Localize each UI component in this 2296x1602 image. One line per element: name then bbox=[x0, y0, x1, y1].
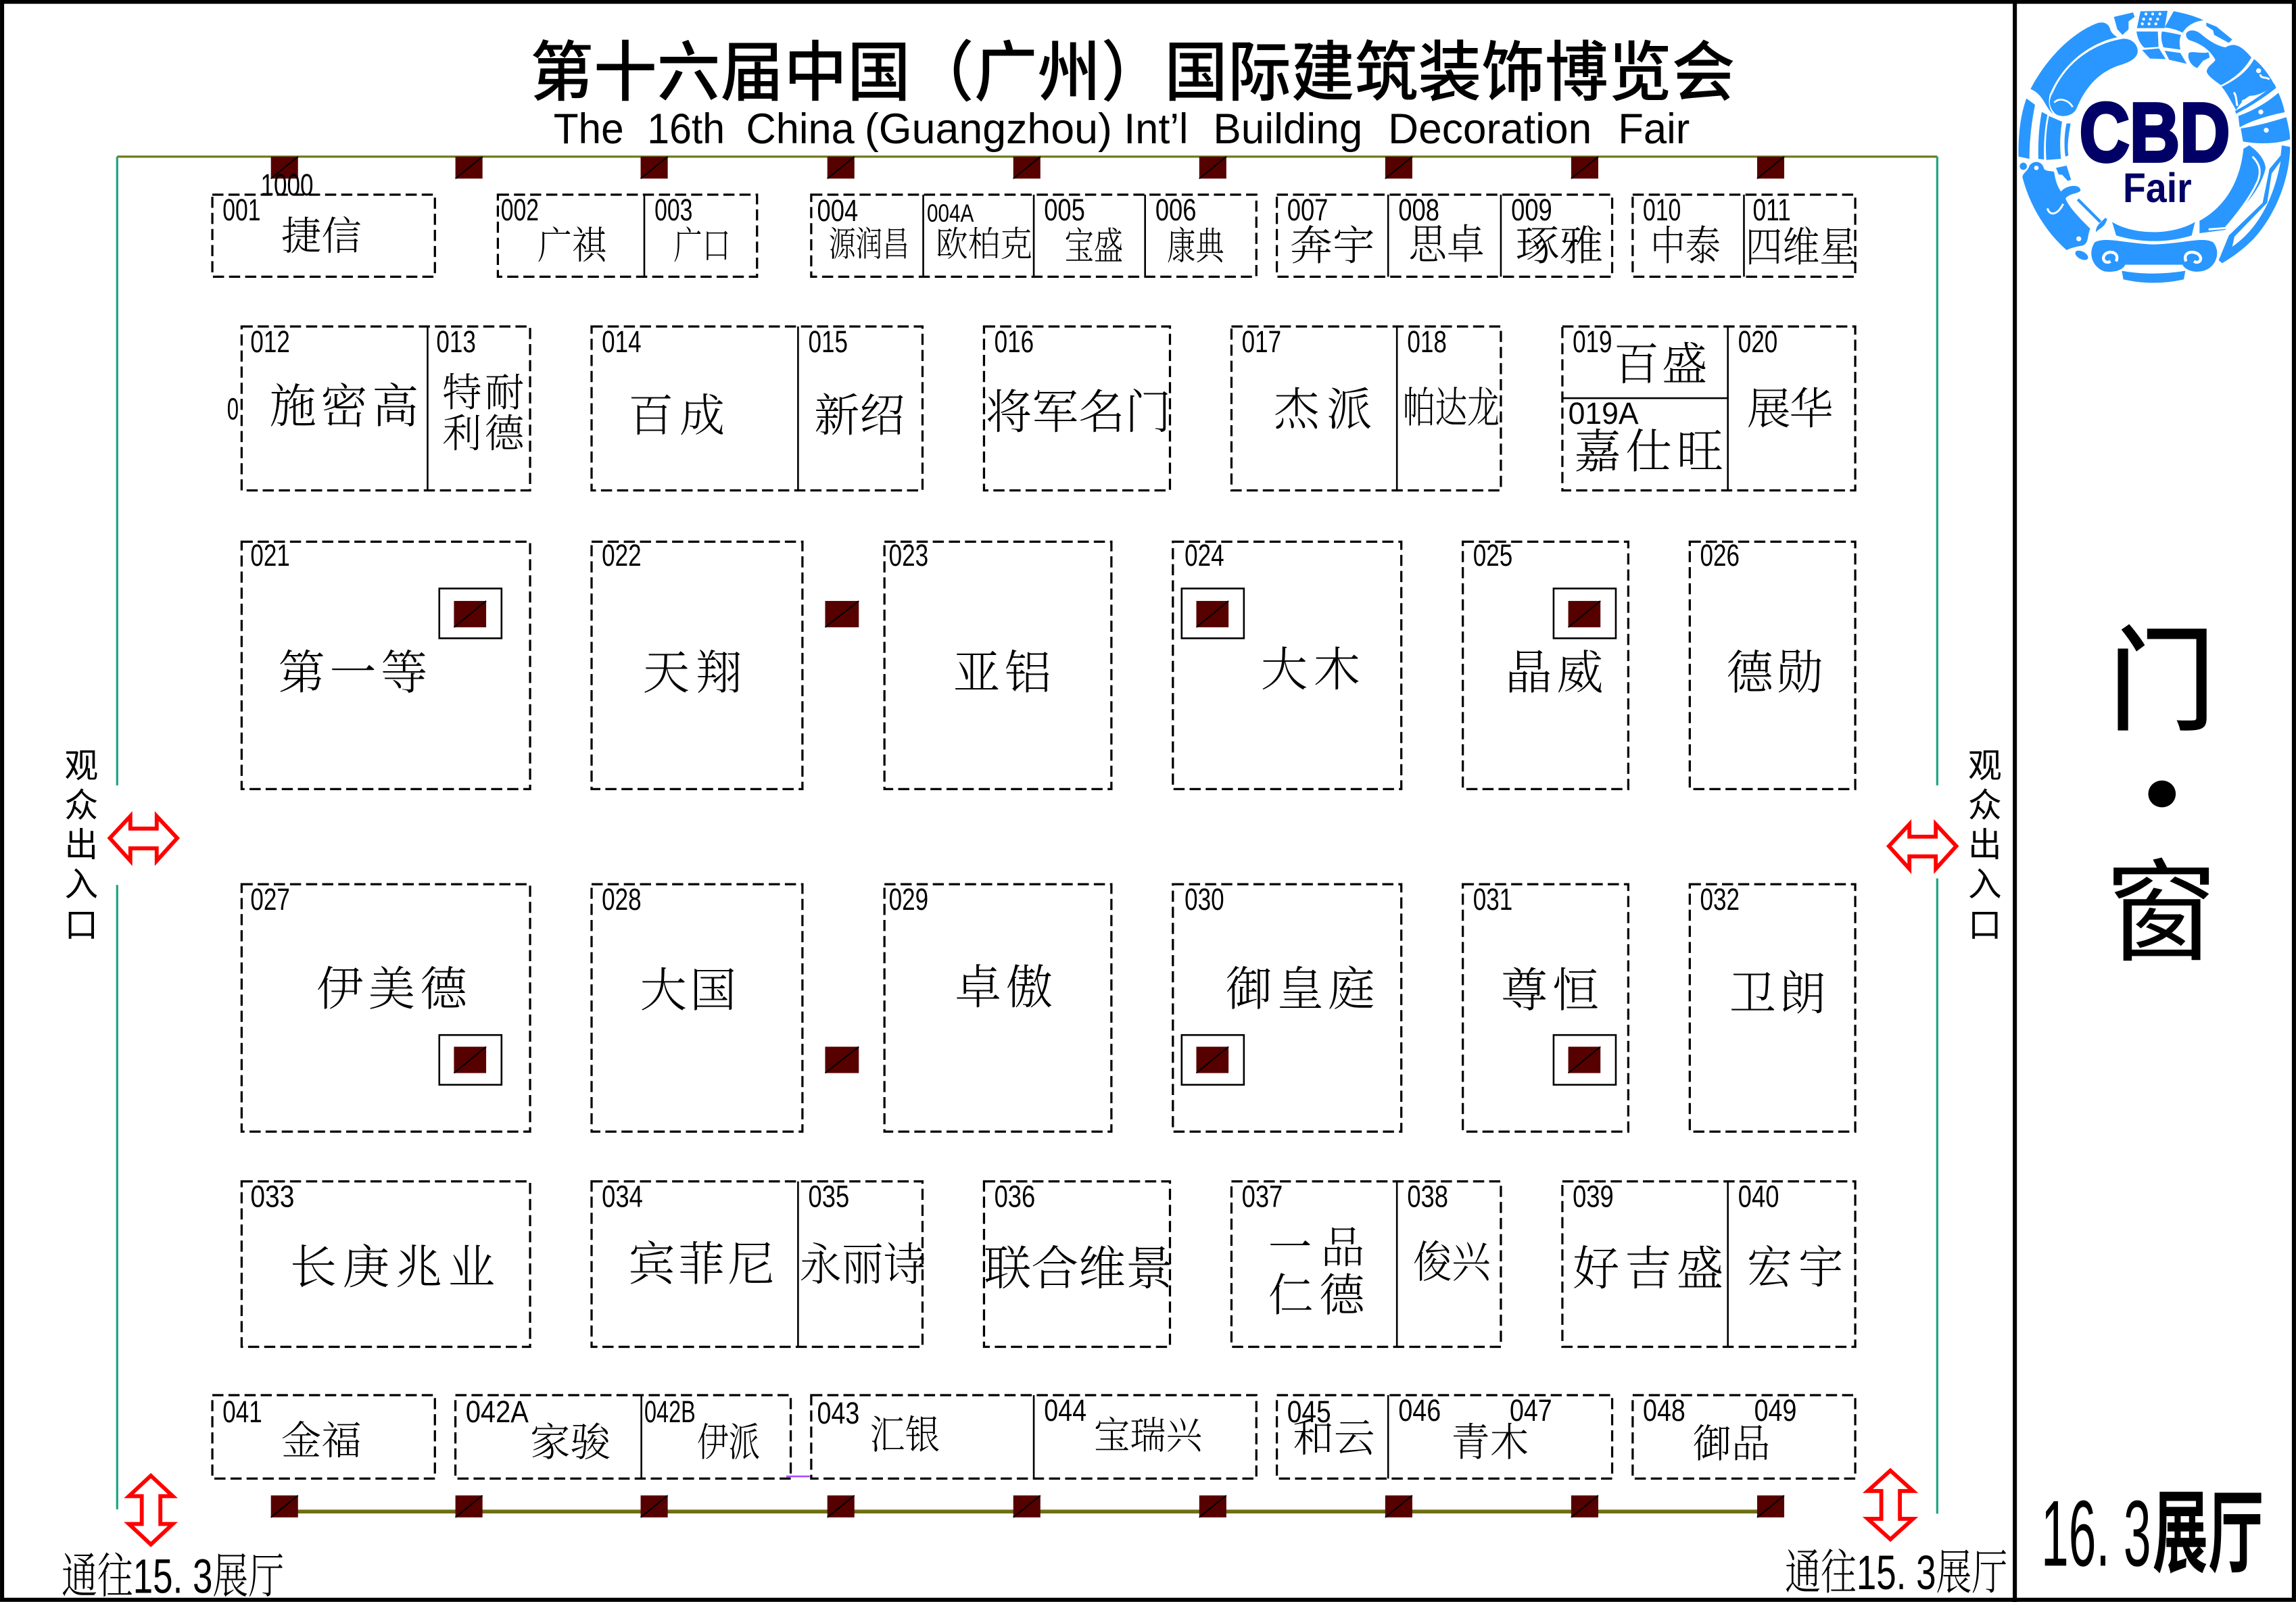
right visitor entrance label: 众 bbox=[1968, 786, 2002, 824]
booths 004-006: 康典 bbox=[1167, 226, 1225, 268]
booth row 3 bbox=[241, 538, 1855, 789]
booths 045-047: 046 bbox=[1398, 1393, 1441, 1428]
booth 031: 031 bbox=[1473, 882, 1512, 917]
booth 030 bbox=[1173, 882, 1402, 1132]
arrow: bottom left passage bbox=[129, 1476, 173, 1545]
booths 007-009: 007 bbox=[1287, 193, 1328, 227]
right visitor entrance label bbox=[1968, 747, 2002, 944]
logo: CBD Fair bbox=[2019, 11, 2290, 283]
booth 029: 卓傲 bbox=[955, 962, 1053, 1014]
chinese title: 第十六届中国（广州）国际建筑装饰博览会 bbox=[530, 36, 1735, 110]
left visitor entrance label: 入 bbox=[64, 865, 98, 903]
booth 027: 027 bbox=[250, 882, 290, 917]
booth 024 bbox=[1173, 538, 1402, 789]
booths 039-040: 039 bbox=[1573, 1180, 1614, 1214]
booth 023: 亚铝 bbox=[953, 647, 1051, 699]
booth row 2 bbox=[227, 324, 1855, 491]
booths 045-047: 047 bbox=[1510, 1393, 1552, 1428]
booths 014-015 bbox=[592, 324, 922, 491]
booth 001 bbox=[212, 168, 435, 276]
booth 029: 029 bbox=[889, 882, 928, 917]
booth 026: 026 bbox=[1700, 538, 1740, 573]
booths 019-020 bbox=[1562, 324, 1855, 491]
english title: The bbox=[554, 105, 624, 153]
booth row 1 bbox=[212, 168, 1857, 276]
english title: China bbox=[746, 105, 855, 153]
booth row 6 bbox=[212, 1393, 1855, 1478]
bottom wall columns bbox=[271, 1495, 1784, 1518]
booths 037-038 bbox=[1231, 1180, 1501, 1347]
english title: (Guangzhou) bbox=[865, 105, 1112, 153]
booths 004-006: 源润昌 bbox=[829, 226, 909, 264]
booths 019-020: 展华 bbox=[1747, 385, 1834, 434]
booths 019-020: 020 bbox=[1738, 324, 1777, 359]
booth 016 bbox=[984, 324, 1172, 491]
booths 019-020: 019 bbox=[1573, 324, 1612, 359]
booths 039-040: 040 bbox=[1738, 1180, 1779, 1214]
label: to hall 15.3 left: 通往15. 3展厅 bbox=[62, 1549, 284, 1602]
booths 043-044: 043 bbox=[817, 1396, 859, 1430]
booths 039-040 bbox=[1562, 1180, 1855, 1347]
booth 027: 伊美德 bbox=[316, 963, 469, 1015]
booth 021: 021 bbox=[250, 538, 290, 573]
left visitor entrance label bbox=[64, 747, 98, 944]
booths 012-013 bbox=[227, 324, 530, 491]
booths 002-003: 002 bbox=[501, 193, 539, 227]
section name: door and window: 窗 bbox=[2105, 851, 2218, 975]
english title: Int’l bbox=[1124, 105, 1189, 153]
booth 024: 大木 bbox=[1261, 644, 1360, 696]
booths 004-006: 欧柏克 bbox=[936, 226, 1032, 264]
booth 036: 036 bbox=[995, 1180, 1035, 1214]
section name: door and window: 门 bbox=[2109, 618, 2216, 746]
title bbox=[530, 36, 1735, 153]
booth 022: 022 bbox=[602, 538, 642, 573]
booth 030: 御皇庭 bbox=[1226, 963, 1375, 1015]
english title: 16th bbox=[647, 105, 725, 153]
booths 039-040: 好吉盛 bbox=[1573, 1242, 1723, 1294]
booths 043-044: 宝瑞兴 bbox=[1094, 1415, 1203, 1457]
booths 017-018: 018 bbox=[1407, 324, 1447, 359]
booths 007-009: 琢雅 bbox=[1516, 224, 1604, 269]
booths 037-038: 俊兴 bbox=[1413, 1239, 1491, 1288]
booths 014-015: 014 bbox=[602, 324, 642, 359]
booths 045-047 bbox=[1277, 1393, 1612, 1478]
booths 004-006 bbox=[811, 193, 1256, 276]
booths 043-044: 汇银 bbox=[870, 1413, 940, 1457]
booth 023: 023 bbox=[889, 538, 928, 573]
booth 026: 德勋 bbox=[1726, 647, 1823, 699]
booth 041 bbox=[212, 1394, 435, 1478]
booths 004-006: 004 bbox=[817, 193, 858, 228]
left visitor entrance label: 观 bbox=[64, 747, 98, 785]
booths 007-009: 008 bbox=[1398, 193, 1439, 227]
booths 042A-042B: 042B bbox=[644, 1394, 696, 1429]
booth 001: 捷信 bbox=[281, 214, 362, 258]
booth 041: 金福 bbox=[281, 1419, 362, 1463]
booth 001: 001 bbox=[222, 193, 261, 227]
logo ring bbox=[2019, 11, 2290, 283]
booths 039-040: 宏宇 bbox=[1747, 1242, 1844, 1293]
right visitor entrance label: 口 bbox=[1968, 906, 2002, 944]
left visitor entrance label: 口 bbox=[64, 906, 98, 944]
arrow: bottom right passage bbox=[1867, 1471, 1913, 1539]
booth 036 bbox=[984, 1180, 1173, 1347]
left visitor entrance label: 众 bbox=[64, 786, 98, 824]
english title: Building bbox=[1213, 105, 1362, 153]
booths 043-044: 044 bbox=[1044, 1393, 1086, 1428]
booths 007-009: 思卓 bbox=[1409, 222, 1485, 268]
booths 019-020: 百盛 bbox=[1614, 339, 1707, 390]
booths 034-035 bbox=[592, 1180, 926, 1347]
booths 048-049: 049 bbox=[1754, 1393, 1796, 1428]
booths 019-020: 嘉仕旺 bbox=[1574, 426, 1723, 478]
booths 004-006: 004A bbox=[927, 199, 974, 227]
hall number: 16. 3 bbox=[2041, 1482, 2151, 1586]
booths 010-011: 中泰 bbox=[1650, 224, 1721, 269]
booths 037-038: 037 bbox=[1242, 1180, 1283, 1214]
booths 012-013: 013 bbox=[436, 324, 476, 359]
booths 012-013: 012 bbox=[250, 324, 290, 359]
booth 025: 晶威 bbox=[1505, 647, 1604, 699]
booths 048-049: 048 bbox=[1643, 1393, 1685, 1428]
booths 012-013: 0 bbox=[227, 391, 239, 426]
right visitor entrance label: 观 bbox=[1968, 747, 2002, 785]
booth 033 bbox=[241, 1180, 530, 1347]
booth row 4 bbox=[241, 882, 1855, 1132]
booths 007-009: 009 bbox=[1511, 193, 1552, 227]
arrow: right entrance bbox=[1889, 824, 1957, 869]
booths 017-018: 杰派 bbox=[1274, 385, 1372, 435]
booth 032 bbox=[1690, 882, 1855, 1132]
booths 002-003 bbox=[498, 193, 757, 276]
booths 014-015: 百成 bbox=[628, 391, 725, 441]
booths 002-003: 广口 bbox=[673, 225, 731, 267]
booths 045-047: 青木 bbox=[1451, 1421, 1529, 1465]
top wall columns bbox=[271, 157, 1784, 178]
booth 036: 联合维景 bbox=[984, 1242, 1173, 1294]
booth 024: 024 bbox=[1185, 538, 1224, 573]
english title bbox=[554, 105, 1690, 153]
booths 034-035: 永丽诗 bbox=[800, 1240, 926, 1290]
english title: Fair bbox=[1618, 105, 1690, 153]
booth 033: 长庚兆业 bbox=[290, 1241, 495, 1293]
booth 041: 041 bbox=[222, 1394, 262, 1429]
label: to hall 15.3 right: 通往15. 3展厅 bbox=[1785, 1546, 2007, 1600]
booths 014-015: 015 bbox=[809, 324, 848, 359]
booths 037-038: 038 bbox=[1407, 1180, 1448, 1214]
booth 026 bbox=[1690, 538, 1855, 789]
booth 022 bbox=[592, 538, 803, 789]
booths 014-015: 新绍 bbox=[814, 391, 905, 441]
booths 042A-042B: 家骏 bbox=[530, 1421, 611, 1465]
booths 012-013: 利德 bbox=[442, 412, 525, 456]
booths 010-011: 四维星 bbox=[1746, 226, 1857, 271]
booths 045-047: 045 bbox=[1287, 1394, 1331, 1429]
section name: door and window bbox=[2105, 618, 2218, 975]
booth 031 bbox=[1463, 882, 1628, 1132]
booths 010-011: 011 bbox=[1752, 193, 1791, 227]
booth 021 bbox=[241, 538, 530, 789]
booth 016: 016 bbox=[995, 324, 1034, 359]
logo wordmark Fair: Fair bbox=[2123, 165, 2192, 212]
arrow: left entrance bbox=[110, 816, 177, 860]
booth 028 bbox=[592, 882, 803, 1132]
booths 048-049: 御品 bbox=[1693, 1422, 1770, 1466]
booth 025: 025 bbox=[1473, 538, 1512, 573]
hall walls bbox=[117, 157, 1937, 1513]
booths 034-035: 宾菲尼 bbox=[628, 1238, 775, 1290]
booths 017-018: 017 bbox=[1242, 324, 1281, 359]
right visitor entrance label: 入 bbox=[1968, 865, 2002, 903]
booth 032: 032 bbox=[1700, 882, 1740, 917]
logo wordmark CBD: CBD bbox=[2080, 87, 2230, 180]
booths 045-047: 和云 bbox=[1293, 1416, 1375, 1460]
booth 027 bbox=[241, 882, 530, 1132]
booth 022: 天翔 bbox=[643, 647, 742, 699]
booths 042A-042B bbox=[456, 1394, 791, 1478]
booth 030: 030 bbox=[1185, 882, 1224, 917]
booth 023 bbox=[884, 538, 1111, 789]
booths 012-013: 特耐 bbox=[442, 371, 524, 415]
booth row 5 bbox=[241, 1180, 1855, 1347]
booths 048-049 bbox=[1633, 1393, 1855, 1478]
english title: Decoration bbox=[1388, 105, 1592, 153]
booths 037-038: 一品 bbox=[1268, 1224, 1365, 1273]
booths 002-003: 003 bbox=[654, 193, 692, 227]
booths 042A-042B: 伊派 bbox=[697, 1421, 760, 1465]
booth 021: 第一等 bbox=[279, 647, 427, 699]
booth 016: 将军名门 bbox=[986, 386, 1172, 438]
left visitor entrance label: 出 bbox=[64, 826, 98, 864]
booth 033: 033 bbox=[250, 1180, 294, 1214]
booths 034-035: 035 bbox=[809, 1180, 849, 1214]
booth 028: 028 bbox=[602, 882, 642, 917]
right visitor entrance label: 出 bbox=[1968, 826, 2002, 864]
booth 032: 卫朗 bbox=[1729, 967, 1826, 1019]
booth 025 bbox=[1463, 538, 1628, 789]
booths 034-035: 034 bbox=[602, 1180, 643, 1214]
booths 004-006: 005 bbox=[1044, 193, 1085, 227]
booths 043-044 bbox=[811, 1393, 1256, 1478]
booth 031: 尊恒 bbox=[1501, 965, 1599, 1017]
booths 010-011: 010 bbox=[1643, 193, 1681, 227]
booths 002-003: 广祺 bbox=[537, 225, 606, 267]
booths 042A-042B: 042A bbox=[466, 1394, 529, 1429]
booth 001: 1000 bbox=[261, 168, 314, 202]
booths 004-006: 006 bbox=[1155, 193, 1196, 227]
interior columns bbox=[439, 589, 1616, 1085]
booths 017-018 bbox=[1231, 324, 1501, 491]
booth 029 bbox=[884, 882, 1111, 1132]
booths 019-020: 019A bbox=[1569, 396, 1639, 431]
booths 007-009 bbox=[1277, 193, 1612, 276]
booths 004-006: 宝盛 bbox=[1065, 226, 1123, 268]
booths 017-018: 帕达龙 bbox=[1403, 385, 1500, 432]
booths 010-011 bbox=[1633, 193, 1857, 276]
booths 012-013: 施密高 bbox=[270, 381, 418, 433]
booth 028: 大国 bbox=[640, 965, 736, 1017]
booths 037-038: 仁德 bbox=[1268, 1270, 1365, 1321]
booths 007-009: 奔宇 bbox=[1290, 224, 1375, 269]
